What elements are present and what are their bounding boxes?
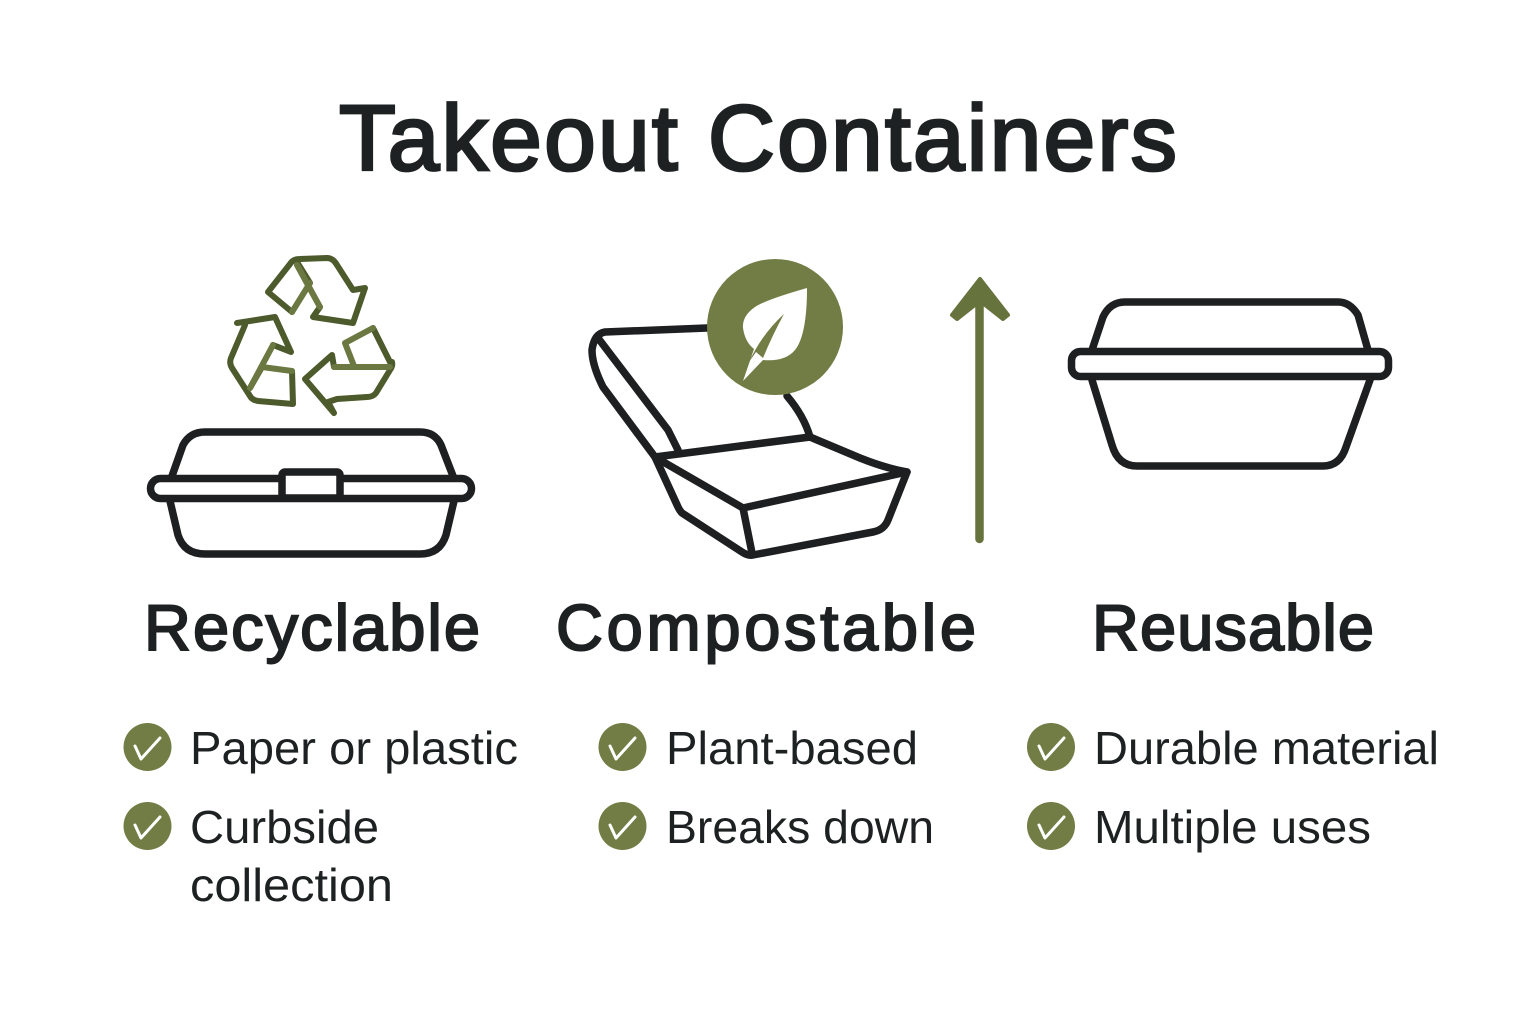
list item: curbside collection <box>190 801 393 911</box>
heading: compostable: Compostable <box>556 591 976 664</box>
panel: reusable <box>1027 302 1439 853</box>
check icon: paper or plastic <box>124 723 172 771</box>
check icon: durable material <box>1027 723 1075 771</box>
title: Takeout Containers <box>339 86 1177 190</box>
list item: multiple uses: Multiple uses <box>1094 801 1371 853</box>
list item: curbside collection: collection <box>190 859 393 911</box>
panel: recyclable <box>124 258 518 911</box>
list item: paper or plastic: Paper or plastic <box>190 722 518 774</box>
check icon: breaks down <box>598 802 646 850</box>
icon: closed container with latch <box>150 432 472 554</box>
icon: recycling arrows <box>230 258 392 413</box>
list: reusable benefits <box>1027 722 1439 853</box>
icon: open container <box>592 328 907 555</box>
list item: curbside collection: Curbside <box>190 801 379 853</box>
icon: leaf badge <box>707 259 843 395</box>
heading: reusable: Reusable <box>1092 591 1374 664</box>
list: recyclable benefits <box>124 722 518 911</box>
panel: compostable <box>556 259 976 853</box>
list item: durable material: Durable material <box>1094 722 1439 774</box>
check icon: plant-based <box>598 723 646 771</box>
check icon: curbside collection <box>124 802 172 850</box>
icon: closed container <box>1072 302 1388 466</box>
list: compostable benefits <box>598 722 934 853</box>
list item: breaks down: Breaks down <box>666 801 934 853</box>
arrow: upward <box>952 279 1008 539</box>
check icon: multiple uses <box>1027 802 1075 850</box>
list item: plant-based: Plant-based <box>666 722 918 774</box>
heading: recyclable: Recyclable <box>144 591 480 664</box>
